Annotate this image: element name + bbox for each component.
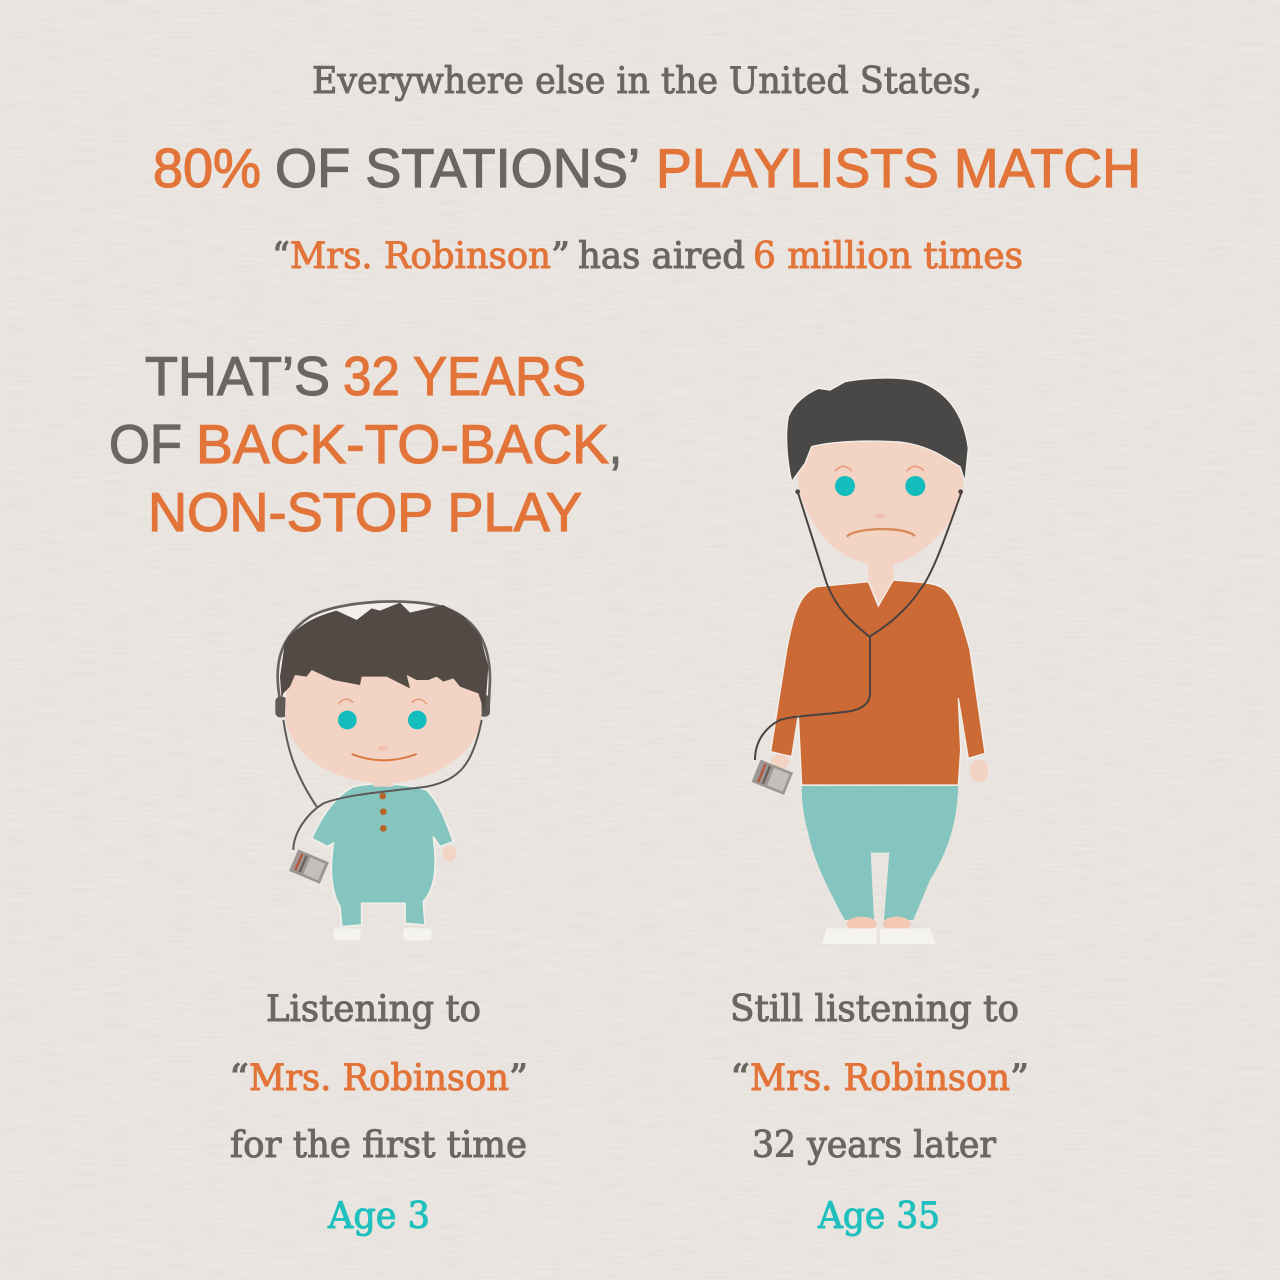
child neck — [373, 770, 393, 787]
child body — [312, 784, 453, 927]
secondary heading: 32 years: NON-STOP PLAY — [148, 481, 582, 543]
caption: adult: ” — [1010, 1058, 1029, 1099]
subheading: airplay count: 6 million times — [753, 236, 1023, 277]
secondary heading: 32 years: 32 YEARS — [343, 345, 586, 407]
main heading: PLAYLISTS MATCH — [656, 137, 1141, 199]
adult shirt — [771, 580, 985, 785]
caption: adult: Mrs. Robinson — [750, 1058, 1010, 1099]
adult earphone cable — [755, 490, 962, 760]
adult nose — [875, 513, 885, 519]
child ear cups — [275, 695, 490, 717]
illustration: child with headphones — [275, 601, 490, 940]
caption: adult: 32 years later — [752, 1125, 997, 1166]
adult music player — [752, 760, 793, 795]
caption: child: Listening to — [266, 989, 481, 1030]
subheading: airplay count: ” — [551, 236, 570, 277]
child earphone cable — [283, 720, 482, 850]
age label: adult: Age 35 — [817, 1196, 940, 1237]
secondary heading: 32 years: , — [609, 413, 622, 475]
subheading: airplay count — [272, 236, 1023, 277]
subheading: airplay count: Mrs. Robinson — [290, 236, 551, 277]
secondary heading: 32 years: OF — [109, 413, 182, 475]
child shoes — [333, 928, 432, 940]
caption: child: Mrs. Robinson — [249, 1058, 509, 1099]
adult hands — [771, 754, 988, 782]
secondary heading: 32 years — [109, 345, 622, 543]
adult trousers — [802, 786, 958, 920]
child headband — [278, 601, 490, 713]
child buttons — [379, 793, 387, 832]
child hand — [443, 845, 456, 861]
caption: adult — [730, 989, 1029, 1166]
caption: adult: “ — [730, 1058, 750, 1099]
adult feet — [847, 917, 911, 931]
adult eyes — [835, 476, 925, 496]
secondary heading: 32 years: BACK-TO-BACK — [196, 413, 609, 475]
intro line: Everywhere else in the United States, — [312, 61, 982, 102]
main heading: 80% — [153, 137, 261, 199]
caption: child: “ — [229, 1058, 249, 1099]
child hair — [280, 603, 488, 713]
adult hair — [787, 378, 968, 482]
child eyes — [338, 711, 427, 729]
age label: child: Age 3 — [327, 1196, 430, 1237]
child nose — [378, 746, 388, 751]
caption: child: ” — [509, 1058, 528, 1099]
subheading: airplay count: has aired — [578, 236, 745, 277]
adult shoes — [822, 928, 936, 944]
adult frown — [847, 529, 915, 537]
illustration: adult with earphones — [752, 378, 988, 944]
main heading — [153, 137, 1141, 199]
child smile — [352, 754, 417, 760]
child eyebrows — [338, 699, 427, 704]
child face — [285, 670, 482, 783]
secondary heading: 32 years: THAT’S — [145, 345, 330, 407]
adult neck and face — [798, 440, 963, 605]
main heading: OF STATIONS’ — [275, 137, 640, 199]
subheading: airplay count: “ — [272, 236, 290, 277]
child music player — [289, 849, 329, 884]
caption: child — [229, 989, 528, 1166]
caption: adult: Still listening to — [730, 989, 1019, 1030]
caption: child: for the first time — [230, 1125, 527, 1166]
adult eyebrows — [835, 466, 924, 471]
